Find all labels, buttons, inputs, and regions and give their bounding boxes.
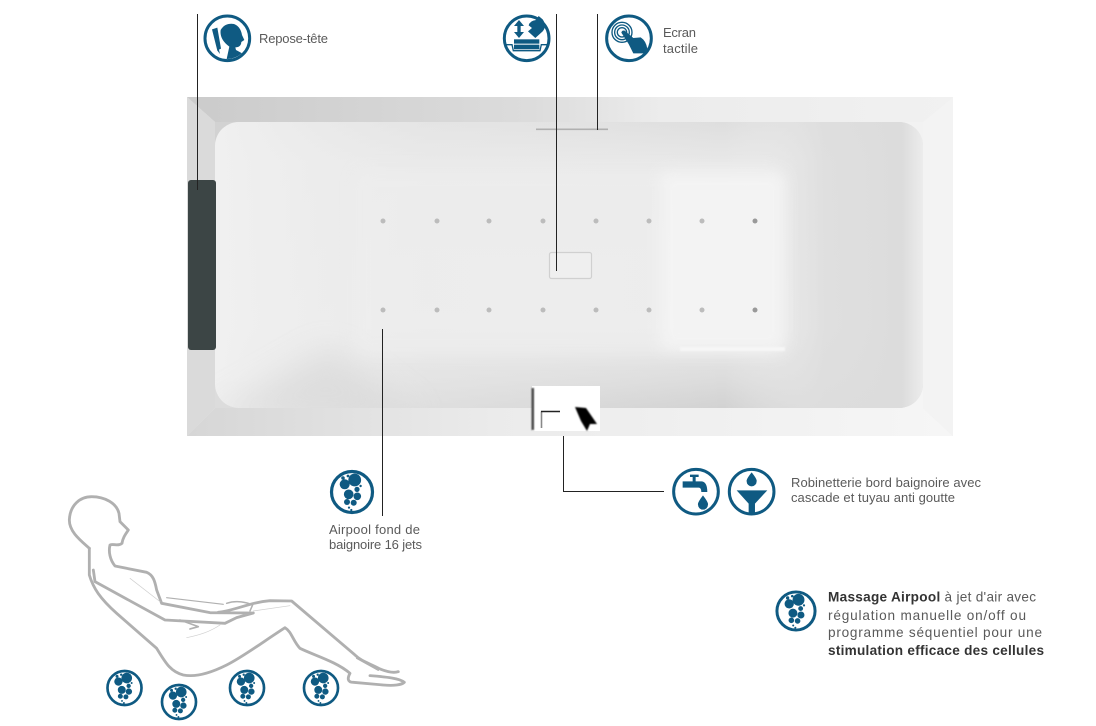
label: Repose-tête: Repose-tête	[259, 31, 328, 46]
icon: bath adjust with hand	[504, 16, 549, 61]
icon: bubbles position 3	[230, 671, 264, 705]
touch screen strip	[536, 128, 608, 130]
text: massage airpool description: Massage Airpool à jet d'air avec	[828, 590, 1036, 604]
label: Robinetterie	[791, 475, 982, 505]
text: massage airpool description	[828, 590, 1044, 658]
label: Robinetterie: cascade et tuyau anti goutte	[791, 490, 955, 505]
icon: faucet	[674, 469, 718, 514]
icon: funnel with drop	[729, 469, 774, 514]
icon: massage airpool	[777, 592, 815, 630]
icon: bubbles position 4	[304, 671, 338, 705]
icon: bubbles position 2	[162, 685, 196, 719]
bathtub	[187, 97, 953, 436]
label: Airpool fond de baignoire 16 jets: Airpool fond de	[329, 522, 420, 537]
icon: bubbles position 1	[107, 671, 142, 705]
icon: touch screen	[607, 16, 651, 61]
icon: headrest	[205, 16, 250, 67]
text: massage airpool description: stimulation efficace des cellules	[828, 643, 1044, 658]
leader lines	[198, 14, 664, 516]
air jets	[380, 218, 758, 312]
label: Ecran tactile: Ecran	[663, 25, 696, 40]
label: Ecran tactile: tactile	[663, 41, 698, 56]
bathtub rim	[187, 97, 953, 436]
text: massage airpool description: régulation manuelle on/off ou	[828, 608, 1026, 623]
label: Ecran tactile	[663, 25, 698, 56]
bathtub basin	[205, 122, 923, 420]
headrest	[188, 180, 216, 350]
label: Robinetterie: Robinetterie bord baignoire avec	[791, 475, 982, 490]
text: massage airpool description: programme séquentiel pour une	[828, 625, 1042, 640]
label: Airpool fond de baignoire 16 jets: baignoire 16 jets	[329, 537, 422, 552]
label: Airpool fond de baignoire 16 jets	[329, 522, 422, 552]
drain plate	[550, 252, 592, 278]
illustration: reclining body outline	[69, 497, 404, 685]
icon: airpool bubbles	[332, 472, 372, 512]
bath faucet block	[532, 386, 600, 431]
